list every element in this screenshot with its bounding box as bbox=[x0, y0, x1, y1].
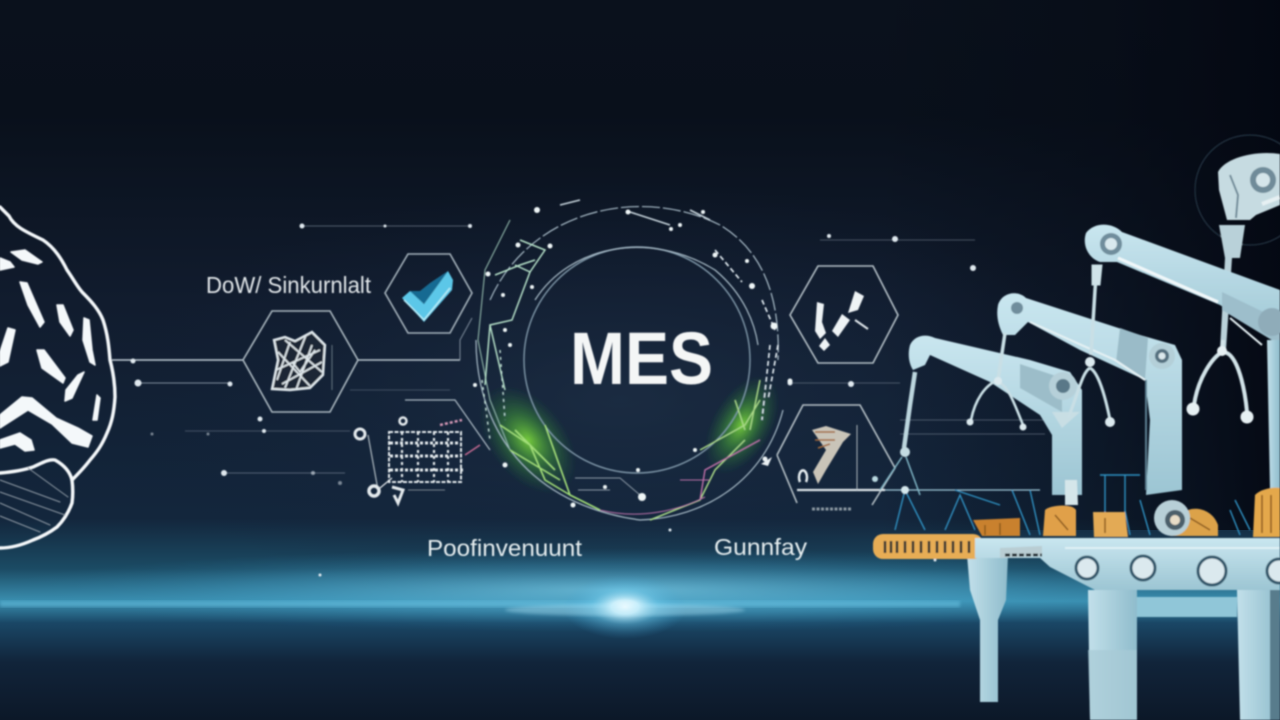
rear brace between legs bbox=[1137, 597, 1237, 617]
left leg bbox=[967, 555, 1008, 702]
central MES ring network bbox=[460, 200, 795, 520]
conveyor roller bbox=[873, 534, 983, 559]
lower-left blueprint grid icon bbox=[355, 418, 463, 503]
label: top-left: DoW/ Sinkurnlalt bbox=[206, 272, 372, 298]
gripper of arm 3 bbox=[1068, 265, 1115, 427]
lower-right hexagon icon: machine bbox=[777, 405, 895, 509]
right leg bbox=[1237, 590, 1280, 720]
gripper of arm 4 bbox=[1186, 340, 1254, 424]
orange products on conveyor bbox=[973, 480, 1280, 537]
top-right hexagon icon: tools bbox=[790, 266, 898, 363]
horizon light band bbox=[0, 548, 1240, 639]
middle leg bbox=[1088, 590, 1137, 720]
top hexagon icon: check mark bbox=[385, 254, 472, 333]
table body bbox=[975, 538, 1280, 590]
left hexagon icon: shield grid bbox=[243, 311, 358, 412]
gripper of arm 2 bbox=[966, 333, 1026, 430]
label: bottom-left: Poofinvenuunt bbox=[427, 535, 583, 561]
robot arm 4 (rightmost, rear) bbox=[1195, 135, 1280, 350]
MES title: MES bbox=[570, 317, 713, 400]
robot arm 2 bbox=[997, 293, 1182, 495]
connector lines bbox=[112, 224, 1045, 576]
brain outline icon bbox=[0, 207, 115, 548]
arrow mark lower right of ring bbox=[761, 457, 772, 466]
bolts bbox=[1076, 556, 1280, 585]
robot arm 3 (large) bbox=[1085, 225, 1280, 490]
conveyor table bbox=[873, 534, 1280, 720]
wiring behind conveyor bbox=[895, 475, 1250, 535]
label: bottom-right: Gunnfay bbox=[714, 534, 808, 560]
robot arm 1 bbox=[872, 336, 1082, 495]
green energy glows bbox=[460, 363, 795, 512]
